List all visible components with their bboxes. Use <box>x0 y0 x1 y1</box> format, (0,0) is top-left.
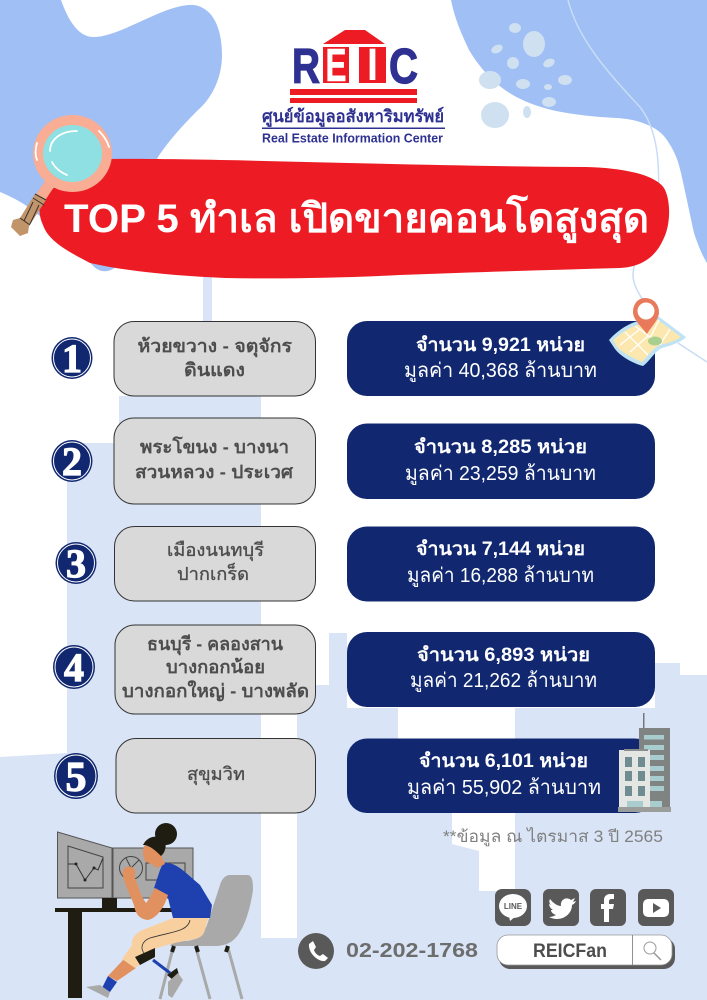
logo: REIC <box>262 30 445 146</box>
badge 4 <box>53 645 95 690</box>
location box 4 <box>115 625 316 714</box>
location box 1: ห้วยขวาง - จตุจักร <box>138 336 292 358</box>
logo: REIC: ศูนย์ข้อมูลอสังหาริมทรัพย์ <box>262 106 444 128</box>
icon: LINE <box>495 889 531 926</box>
value box 1: จำนวน 9,921 หน่วย <box>416 335 585 356</box>
value box 5 <box>347 738 655 813</box>
badge 3: 3 <box>66 541 86 586</box>
title banner: TOP 5 ทำเล เปิดขายคอนโดสูงสุด <box>64 195 649 244</box>
location box 3: ปากเกร็ด <box>177 562 249 584</box>
row 5 <box>54 738 655 813</box>
value box 2: มูลค่า 23,259 ล้านบาท <box>405 463 596 486</box>
background: pale city skyline <box>0 275 707 1000</box>
logo: REIC: Real Estate Information Center <box>262 130 443 146</box>
location box 5: สุขุมวิท <box>187 764 245 785</box>
location box 2: สวนหลวง - ประเวศ <box>135 462 294 482</box>
location box 4: บางกอกน้อย <box>166 657 265 677</box>
location box 5 <box>116 738 316 813</box>
icon: Facebook <box>590 889 626 926</box>
row 3 <box>56 526 655 602</box>
value box 2 <box>347 424 655 499</box>
badge 2: 2 <box>62 439 82 484</box>
location box 2: พระโขนง - บางนา <box>140 436 289 457</box>
value box 3: มูลค่า 16,288 ล้านบาท <box>407 565 594 588</box>
row 4 <box>53 625 655 714</box>
location box 3: เมืองนนทบุรี <box>167 540 264 561</box>
badge 2 <box>52 439 92 484</box>
badge 1: 1 <box>62 336 82 381</box>
value box 5: มูลค่า 55,902 ล้านบาท <box>407 777 601 800</box>
icon: office buildings <box>618 713 671 812</box>
icon: Twitter <box>543 889 579 926</box>
value box 4: มูลค่า 21,262 ล้านบาท <box>410 670 597 693</box>
desk <box>55 898 175 998</box>
logo: REIC: E <box>326 39 346 91</box>
location box 3 <box>114 526 316 601</box>
background: blue blob left <box>0 0 222 271</box>
icon: YouTube <box>638 889 674 926</box>
head and hair <box>143 823 177 868</box>
title banner <box>39 159 669 278</box>
logo: REIC: I <box>367 39 378 90</box>
value box 5: จำนวน 6,101 หน่วย <box>419 751 588 772</box>
left monitor <box>58 832 112 898</box>
footnote: **ข้อมูล ณ ไตรมาส 3 ปี 2565 <box>443 827 663 847</box>
search bar: REICFan <box>533 941 607 962</box>
value box 3 <box>347 526 655 602</box>
value box 4: จำนวน 6,893 หน่วย <box>417 645 590 666</box>
location box 2 <box>114 418 316 504</box>
value box 2: จำนวน 8,285 หน่วย <box>414 437 587 458</box>
value box 1: มูลค่า 40,368 ล้านบาท <box>404 360 597 383</box>
logo: REIC: C <box>389 40 418 94</box>
location box 4: บางกอกใหญ่ - บางพลัด <box>122 680 309 702</box>
row 2 <box>52 418 655 504</box>
chair <box>160 875 253 999</box>
decorative pale dots <box>479 23 572 128</box>
icon: magnifying glass <box>11 115 112 236</box>
value box 3: จำนวน 7,144 หน่วย <box>416 539 585 560</box>
thin curved line <box>568 0 707 362</box>
right monitor <box>113 848 193 898</box>
badge 1 <box>52 336 92 381</box>
location box 4: ธนบุรี - คลองสาน <box>147 634 284 656</box>
background: blue blob right <box>451 0 707 263</box>
badge 5 <box>54 753 98 801</box>
value box 1 <box>347 321 655 396</box>
row 1 <box>52 321 655 396</box>
value box 4 <box>347 632 655 707</box>
badge 5: 5 <box>66 755 86 801</box>
torso and arm <box>122 863 212 920</box>
location box 1: ดินแดง <box>184 360 245 380</box>
social icons <box>495 889 674 926</box>
phone <box>298 933 478 969</box>
icon: map with pin <box>609 298 686 366</box>
illustration: person at desk <box>55 823 253 999</box>
phone: 02-202-1768 <box>346 940 478 962</box>
logo: REIC: R <box>292 40 320 94</box>
badge 4: 4 <box>64 645 84 690</box>
icon: LINE: LINE <box>504 902 523 911</box>
badge 3 <box>56 541 96 586</box>
legs <box>86 918 208 998</box>
location box 1 <box>114 322 316 396</box>
search bar <box>497 935 675 969</box>
